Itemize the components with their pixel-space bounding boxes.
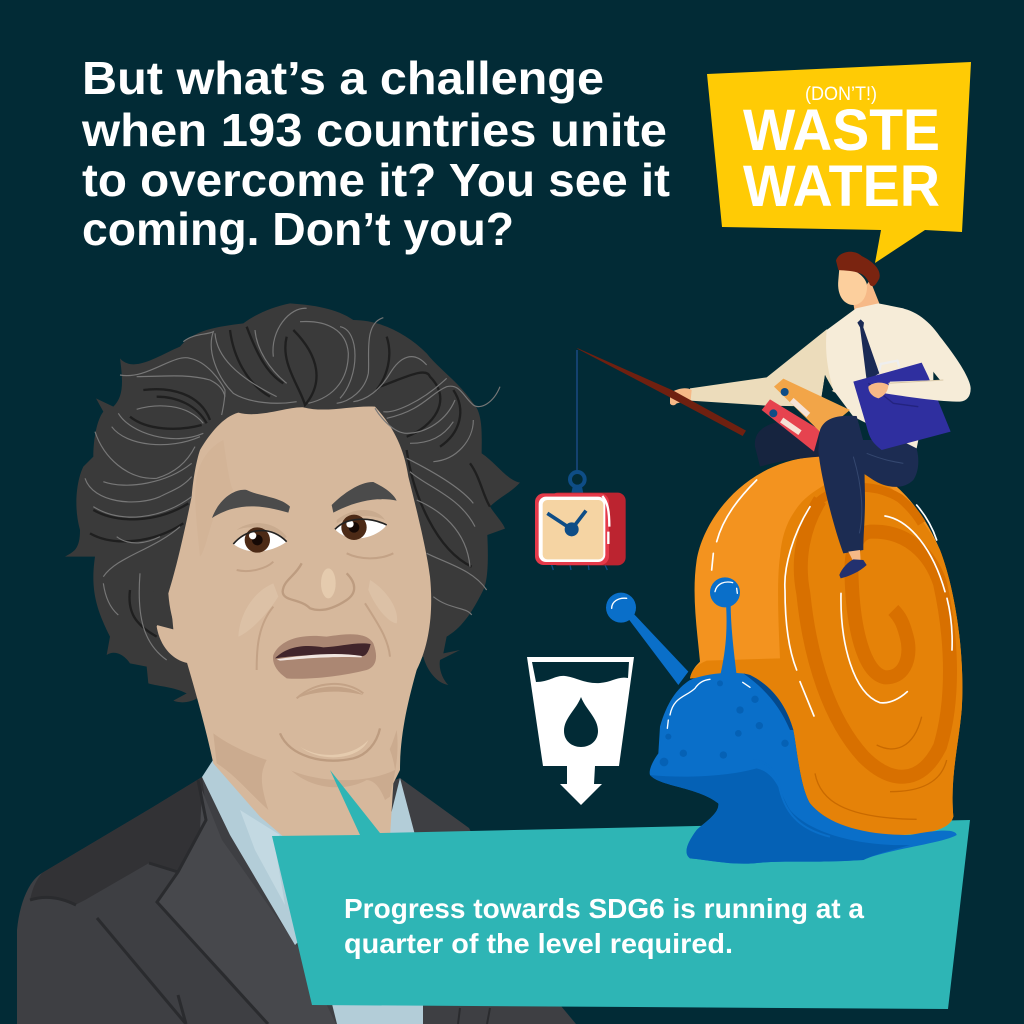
callout text: Progress towards SDG6 is running at a [344,893,864,924]
shell highlights [712,480,952,716]
snail shell [690,456,962,835]
front leg [818,416,867,553]
title [81,52,670,255]
head [838,268,867,305]
speech bubble: waste water [707,62,971,263]
jacket upper shoulder [30,777,205,905]
forehead shade [195,440,233,557]
fishing rod [577,348,746,436]
eyes [233,510,387,553]
icon: water glass with down arrow [527,657,634,805]
briefcase [853,363,951,450]
dark hair strands [90,327,490,637]
title: to overcome it? You see it [82,154,670,206]
hand [868,383,888,398]
shoe [839,559,867,578]
hair [65,303,520,702]
jacket [17,777,576,1024]
jacket bottom lines [458,1008,490,1024]
bubble text [743,84,940,219]
jacket inner panel [157,790,336,1024]
snail body shadow [650,768,910,864]
briefcase handle [879,361,899,371]
bubble text: WASTE [743,98,940,163]
title: coming. Don’t you? [82,203,514,255]
bubble text: WATER [743,154,940,219]
hair shadow over ear [140,590,173,629]
jacket seams [30,780,268,1024]
chin [267,730,395,780]
snail eye stalks [627,603,737,685]
mouth [273,634,376,679]
wrinkles [237,553,393,698]
cheeks [238,580,397,637]
shell dark region [690,473,962,835]
grey hair strands [85,308,500,660]
shell spiral [801,500,950,777]
face and neck [168,406,431,837]
nose [283,563,354,610]
icon: alarm clock on line [535,350,626,570]
sleeve [885,308,971,402]
far leg [755,420,820,467]
arm [690,329,853,407]
neck shade [213,730,398,810]
callout text: quarter of the level required. [344,928,733,959]
tie [857,319,879,381]
title: when 193 countries unite [81,104,667,156]
illustration: man portrait [17,303,576,1024]
callout text [344,893,864,959]
fishing line [575,350,579,472]
neck [853,280,879,316]
torso [826,303,933,448]
ankle [848,550,861,562]
hair [836,252,880,286]
illustration: businessman fishing [577,252,971,578]
eyebrows [212,482,397,518]
binders [762,379,850,452]
shirt [202,760,423,1024]
illustration: snail [606,456,962,864]
speech bubble: teal callout [272,770,970,1009]
title: But what’s a challenge [82,52,604,104]
bubble text: (DON’T!) [805,84,877,105]
ear [157,590,200,663]
snail body [650,673,957,864]
knee [853,440,918,487]
